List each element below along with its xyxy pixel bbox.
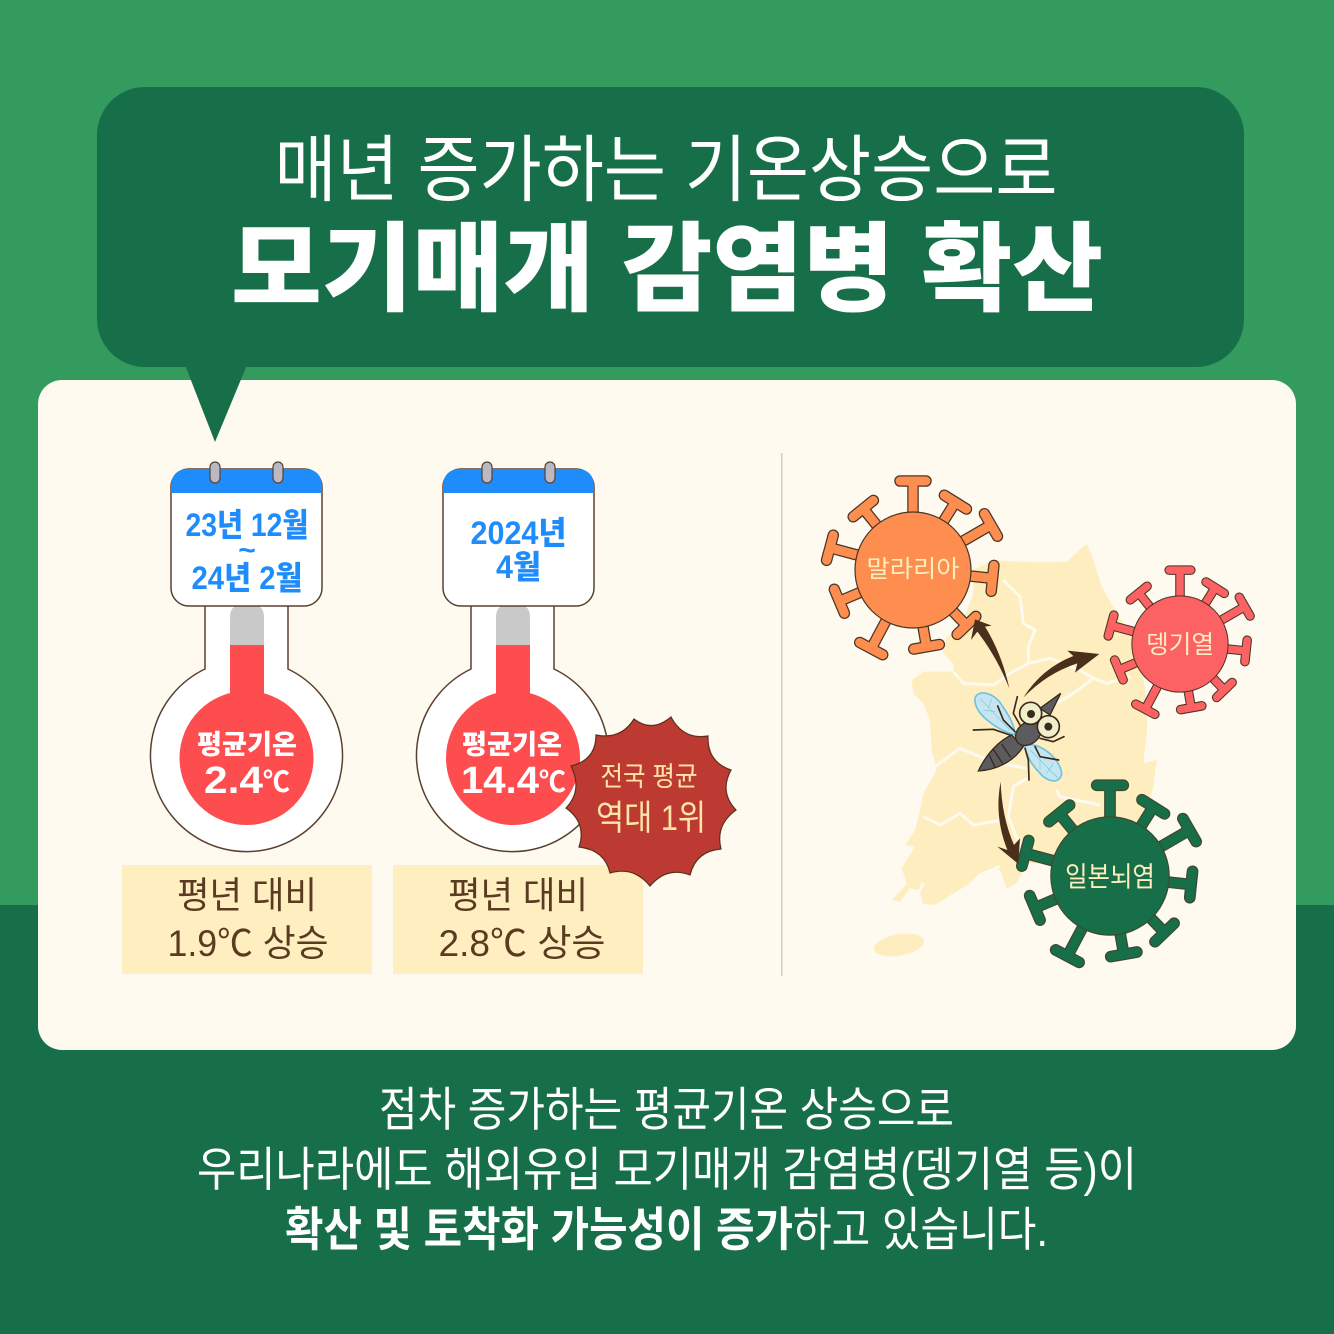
virus: malaria (827, 481, 997, 655)
virus: Japanese encephalitis: 일본뇌염 (1065, 861, 1155, 892)
footer line 3: 확산 및 토착화 가능성이 증가 (285, 1203, 793, 1256)
footer line 1: 점차 증가하는 평균기온 상승으로 (379, 1083, 954, 1136)
calendar: 2024년 (470, 515, 566, 551)
arrow: to dengue (1023, 651, 1099, 698)
title line 2: 모기매개 감염병 확산 (231, 215, 1103, 324)
average temperature: 14.4 (461, 760, 539, 802)
comparison box 2: 평년 대비 (448, 875, 588, 916)
speech bubble header (97, 87, 1244, 442)
average temperature: ℃ (263, 767, 290, 799)
footer text (197, 1083, 1137, 1256)
virus: dengue: 뎅기열 (1146, 631, 1214, 659)
footer line 3: 하고 있습니다. (793, 1203, 1048, 1256)
calendar: 24년 2월 (192, 560, 302, 596)
title line 1: 매년 증가하는 기온상승으로 (274, 130, 1058, 211)
calendar: 4월 (496, 549, 541, 585)
comparison box 1 (122, 865, 372, 974)
average temperature (197, 730, 297, 802)
footer line 2: 우리나라에도 해외유입 모기매개 감염병(뎅기열 등)이 (197, 1143, 1137, 1196)
calendar: ~ (238, 534, 256, 567)
panel: content card (38, 380, 1296, 1050)
comparison box 1: 1.9℃ 상승 (168, 923, 328, 964)
average temperature: ℃ (539, 767, 566, 799)
thermometer 1 (150, 462, 343, 852)
calendar: 23년 12월 (186, 507, 308, 543)
comparison box 2 (393, 865, 643, 974)
arrow: to Japanese encephalitis (997, 782, 1020, 864)
comparison box 2: 2.8℃ 상승 (438, 923, 606, 964)
average temperature: 2.4 (204, 760, 263, 802)
virus: Japanese encephalitis (1022, 785, 1196, 962)
virus: malaria: 말라리아 (866, 556, 960, 583)
map of South Korea (872, 543, 1157, 960)
badge: record high: 전국 평균 (600, 762, 698, 792)
comparison box 1: 평년 대비 (177, 875, 317, 916)
average temperature (461, 730, 566, 802)
average temperature: 평균기온 (197, 730, 297, 760)
virus: dengue (1108, 570, 1250, 714)
badge: record high (566, 717, 736, 886)
calendar (443, 462, 594, 606)
calendar (171, 462, 322, 606)
thermometer 2 (416, 462, 608, 852)
average temperature: 평균기온 (462, 730, 562, 760)
icon: mosquito (973, 693, 1064, 781)
divider (781, 453, 782, 976)
arrow: to malaria (971, 619, 1009, 688)
badge: record high: 역대 1위 (596, 799, 706, 838)
thermometer body (416, 600, 608, 852)
thermometer body (150, 600, 343, 852)
